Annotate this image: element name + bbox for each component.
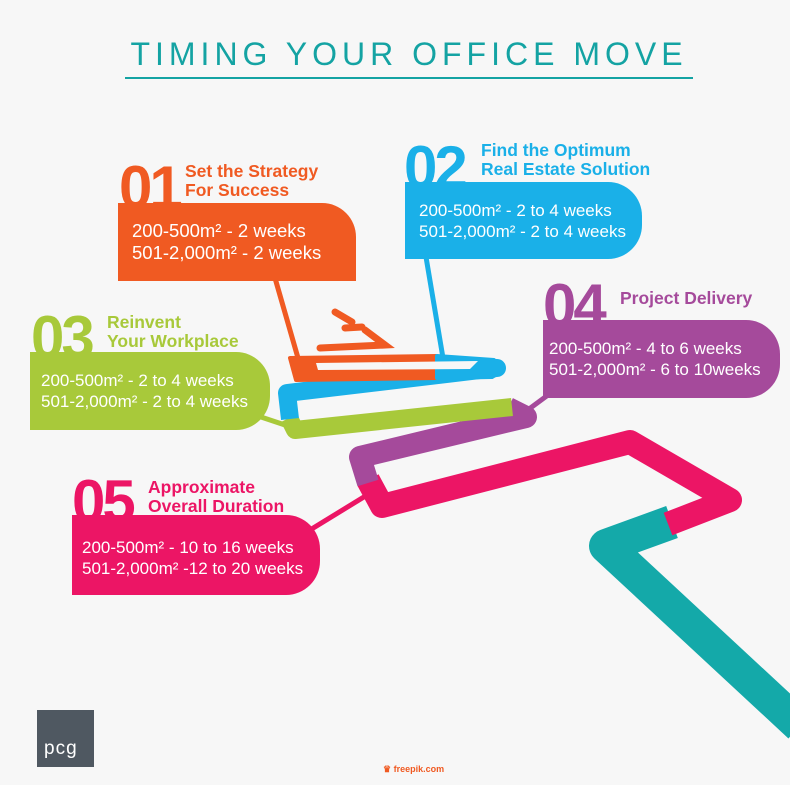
panel 03 xyxy=(30,304,270,430)
pcg logo xyxy=(37,710,94,767)
heading 03: Your Workplace xyxy=(107,331,239,351)
heading 01 xyxy=(185,161,318,200)
box 01: 200-500m² - 2 weeks xyxy=(132,220,306,241)
orange / blue top bar xyxy=(290,356,437,380)
box 04 xyxy=(543,320,780,398)
number 03: 03 xyxy=(31,304,92,371)
box 02 xyxy=(405,182,642,259)
box 03 xyxy=(30,352,270,430)
slot xyxy=(316,361,478,370)
heading 01: Set the Strategy xyxy=(185,161,318,181)
heading 05: Approximate xyxy=(148,477,255,497)
box 03: 501-2,000m² - 2 to 4 weeks xyxy=(41,392,248,411)
heading 04: Project Delivery xyxy=(620,288,752,308)
heading 01: For Success xyxy=(185,180,289,200)
box 03: 200-500m² - 2 to 4 weeks xyxy=(41,371,234,390)
number 04: 04 xyxy=(543,272,604,339)
number 01: 01 xyxy=(119,154,180,221)
panel 05 xyxy=(72,468,320,595)
heading 05: Overall Duration xyxy=(148,496,284,516)
box 04: 501-2,000m² - 6 to 10weeks xyxy=(549,360,761,379)
box 01 xyxy=(118,203,356,281)
heading 02: Find the Optimum xyxy=(481,140,631,160)
pcg logo: pcg xyxy=(44,738,78,759)
box 02: 501-2,000m² - 2 to 4 weeks xyxy=(419,222,626,241)
panel 01 xyxy=(118,154,356,281)
box 04: 200-500m² - 4 to 6 weeks xyxy=(549,339,742,358)
heading 02 xyxy=(481,140,650,179)
number 05: 05 xyxy=(72,468,133,535)
connector lines xyxy=(255,257,548,530)
magenta segment xyxy=(368,442,730,524)
box 05: 200-500m² - 10 to 16 weeks xyxy=(82,538,294,557)
heading 03 xyxy=(107,312,239,351)
green segment xyxy=(289,407,512,430)
box 01: 501-2,000m² - 2 weeks xyxy=(132,242,321,263)
title underline xyxy=(125,77,693,79)
box 05: 501-2,000m² -12 to 20 weeks xyxy=(82,559,303,578)
number 02: 02 xyxy=(404,134,465,201)
purple segment xyxy=(360,408,526,483)
heading 05 xyxy=(148,477,284,516)
panel 02 xyxy=(404,134,650,259)
heading 02: Real Estate Solution xyxy=(481,159,650,179)
freepik credit: ♛ freepik.com xyxy=(383,764,444,774)
orange laptop detail xyxy=(320,312,385,348)
heading 03: Reinvent xyxy=(107,312,181,332)
blue segment xyxy=(287,366,497,419)
winding path xyxy=(287,356,790,726)
title: TIMING YOUR OFFICE MOVE xyxy=(130,36,688,72)
panel 04 xyxy=(543,272,780,398)
teal tail xyxy=(606,522,790,726)
box 05 xyxy=(72,515,320,595)
box 02: 200-500m² - 2 to 4 weeks xyxy=(419,201,612,220)
